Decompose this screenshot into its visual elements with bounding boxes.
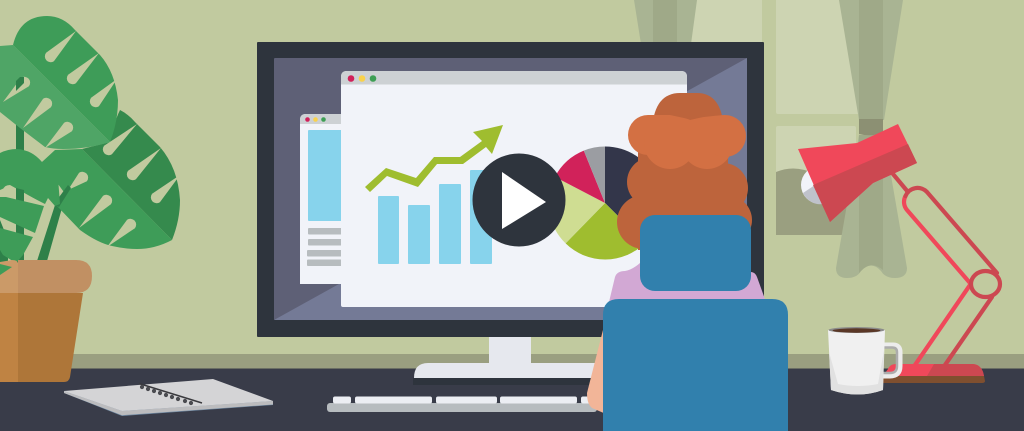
chair headrest xyxy=(640,215,751,291)
monitor xyxy=(257,42,764,385)
right curtain xyxy=(836,0,907,278)
main browser window xyxy=(341,71,687,307)
monitor stand xyxy=(413,335,600,385)
window hill xyxy=(776,168,850,235)
left leaf slot xyxy=(3,185,46,205)
mug body xyxy=(828,330,885,394)
desk lamp xyxy=(798,124,1000,383)
pie chart xyxy=(549,146,662,259)
curtain tie xyxy=(859,119,883,135)
lamp base xyxy=(880,364,985,383)
mug handle xyxy=(882,345,900,376)
left leaf xyxy=(0,149,60,263)
plant xyxy=(0,16,180,382)
lamp arms xyxy=(893,174,1000,365)
lamp bulb xyxy=(801,166,839,204)
screen xyxy=(274,58,747,320)
bar chart xyxy=(378,170,492,264)
monitor bezel xyxy=(257,42,764,337)
hair lower xyxy=(617,93,752,250)
trend arrow xyxy=(365,125,503,192)
right leaf xyxy=(42,110,180,249)
stems xyxy=(0,77,70,263)
coffee xyxy=(828,327,884,333)
window panes xyxy=(660,0,866,235)
left curtain xyxy=(634,0,697,44)
baseboard xyxy=(0,354,1024,369)
keyboard xyxy=(327,396,597,412)
pot xyxy=(0,260,92,382)
stem through slot xyxy=(16,188,24,200)
upper leaf xyxy=(0,16,118,149)
coffee mug xyxy=(828,327,900,394)
desk xyxy=(0,368,1024,431)
hair bun xyxy=(628,115,746,169)
notebook spiral xyxy=(139,384,202,405)
notebook xyxy=(64,379,273,416)
lamp shade xyxy=(798,124,917,222)
small browser window xyxy=(300,114,342,284)
play button xyxy=(472,154,566,246)
chair back xyxy=(603,299,788,431)
person xyxy=(587,93,788,431)
shirt xyxy=(609,263,766,302)
arm xyxy=(587,326,606,414)
